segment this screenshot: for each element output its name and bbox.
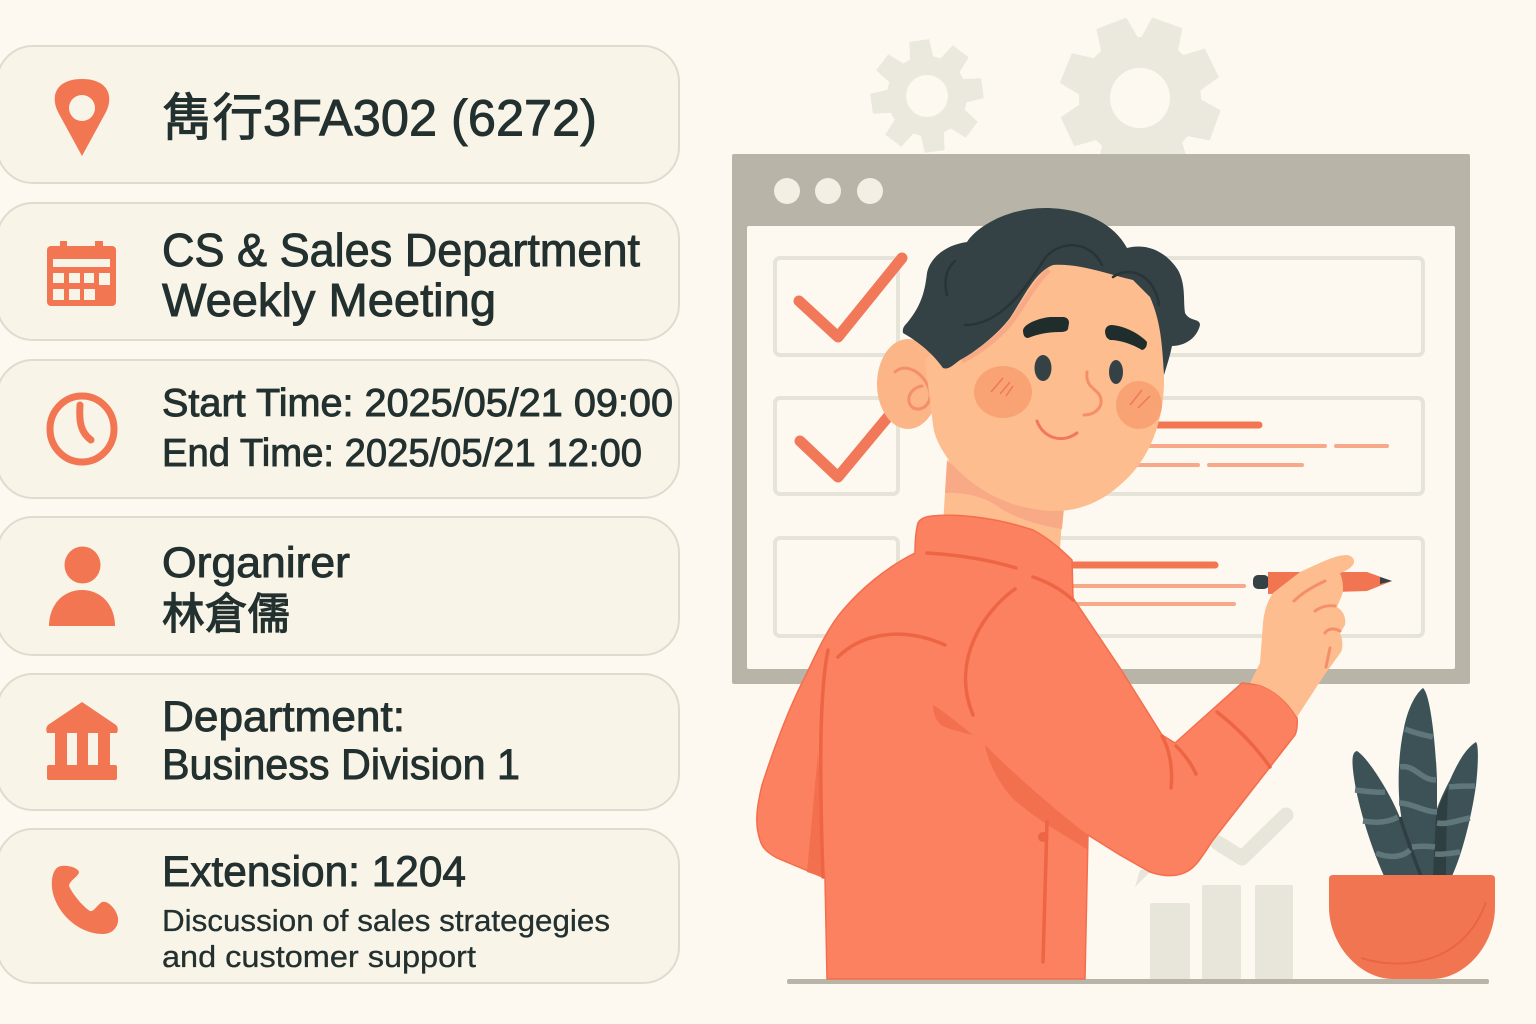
text: room: 雋行3FA302 (6272) (162, 90, 597, 146)
text: start and end time: Start Time: 2025/05/21 09:00 (162, 382, 673, 425)
panel: organizer (0, 517, 679, 655)
shirt folds (821, 553, 1270, 962)
text: description (162, 903, 610, 974)
text: organizer name: 林倉儒 (162, 591, 290, 639)
illustration: potted plant (1329, 688, 1495, 979)
illustration: man writing on checklist (757, 208, 1392, 979)
icon: calendar (47, 241, 116, 306)
text: department name: Business Division 1 (162, 741, 520, 789)
illustration: gears (870, 16, 1222, 180)
illustration: floor line (787, 979, 1489, 984)
panel: extension and purpose (0, 829, 679, 983)
plant leaves (1352, 688, 1478, 876)
text: extension: Extension: 1204 (162, 848, 466, 896)
neck (943, 460, 1064, 548)
cheeks (974, 366, 1162, 429)
pen (1253, 572, 1392, 594)
icon: small gear (870, 39, 984, 153)
icon: telephone (52, 866, 118, 934)
shirt shading (807, 705, 1088, 878)
illustration: browser window (732, 154, 1470, 684)
text: start and end time: End Time: 2025/05/21 12:00 (162, 432, 642, 475)
plant pot (1329, 875, 1495, 979)
hair (903, 208, 1200, 375)
panel: time (0, 360, 679, 498)
face (925, 250, 1164, 511)
text: meeting name (162, 224, 640, 326)
checklist row 1 (775, 258, 1423, 355)
panel: location (0, 46, 679, 183)
panel: department (0, 674, 679, 810)
checklist row 2 (775, 398, 1423, 494)
text: description: Discussion of sales strategegies (162, 903, 610, 938)
icon: person (49, 546, 115, 626)
text: meeting name: CS & Sales Department (162, 224, 640, 276)
text: department name (162, 693, 520, 789)
panel: meeting title (0, 203, 679, 340)
icon: institution building (46, 702, 118, 780)
text: description: and customer support (162, 939, 476, 974)
window control dots (774, 178, 883, 204)
icon: clock (50, 396, 114, 462)
illustration: faint background chart (1135, 815, 1293, 980)
shirt torso and arm (757, 515, 1297, 979)
text: start and end time (162, 382, 673, 475)
eyebrows (1023, 317, 1147, 350)
text: department name: Department: (162, 693, 405, 741)
text: meeting name: Weekly Meeting (162, 274, 496, 326)
head (877, 208, 1200, 511)
checklist row 3 (775, 538, 1423, 636)
icon: large gear (1058, 16, 1222, 180)
text: organizer name (162, 539, 350, 639)
eyes (1034, 355, 1123, 384)
ear (877, 339, 939, 429)
nose (1084, 372, 1101, 415)
text: organizer name: Organirer (162, 539, 350, 587)
hand (1250, 555, 1354, 717)
mouth (1037, 421, 1077, 439)
icon: map pin (55, 79, 109, 156)
